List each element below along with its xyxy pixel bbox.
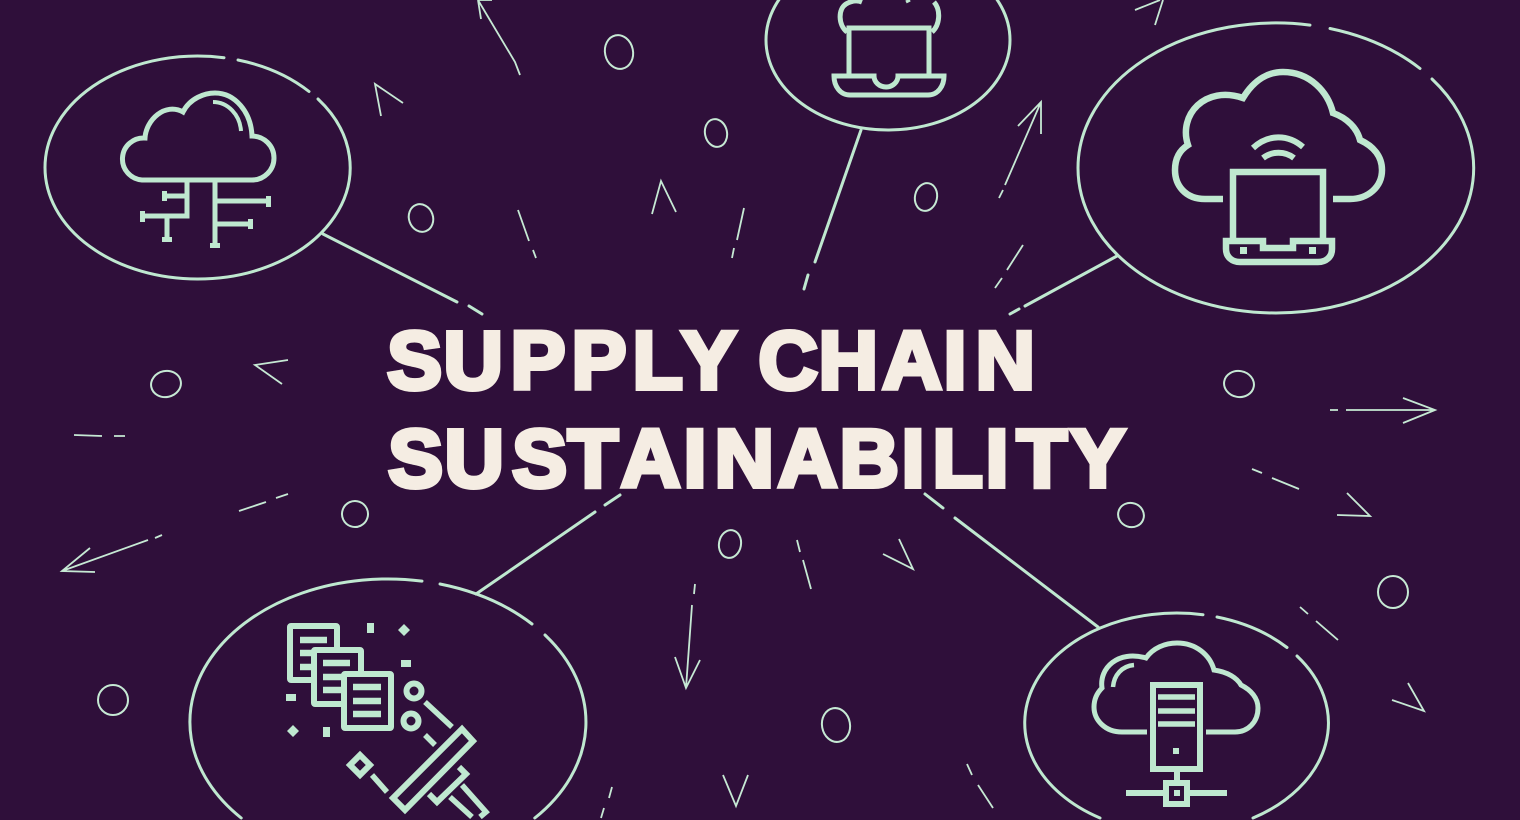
connector: top-left bubble to title: [323, 234, 482, 314]
panel: cloud laptop top: [766, 0, 1010, 130]
title: [387, 316, 1125, 504]
connector: bottom-right bubble to title: [925, 494, 1098, 627]
bubble outline: [45, 56, 350, 279]
title: SUPPLY CHAIN: [387, 316, 1035, 406]
icon: documents and squeegee: [286, 623, 486, 817]
icon: cloud server network: [1094, 643, 1258, 804]
bubble outline: [766, 0, 1010, 130]
icon: laptop with cloud: [834, 0, 944, 95]
connector: bottom-left bubble to title: [476, 495, 620, 594]
panel: cloud server: [1025, 613, 1328, 818]
bubble outline: [190, 579, 586, 818]
connector: top-right bubble to title: [1010, 256, 1117, 314]
panel: cloud circuit network: [45, 56, 350, 279]
icon: cloud with wifi laptop: [1175, 72, 1382, 262]
decorative small circles: [98, 32, 1408, 744]
icon: cloud with circuit: [122, 93, 274, 248]
connector: top bubble to title: [804, 130, 861, 289]
panel: cloud laptop wifi: [1078, 23, 1474, 313]
icon: laptop keys: [1240, 247, 1316, 254]
bubble outline: [1025, 613, 1328, 818]
title: SUSTAINABILITY: [388, 414, 1125, 504]
bubble outline: [1078, 23, 1474, 313]
panel: cleaning documents: [190, 579, 586, 818]
